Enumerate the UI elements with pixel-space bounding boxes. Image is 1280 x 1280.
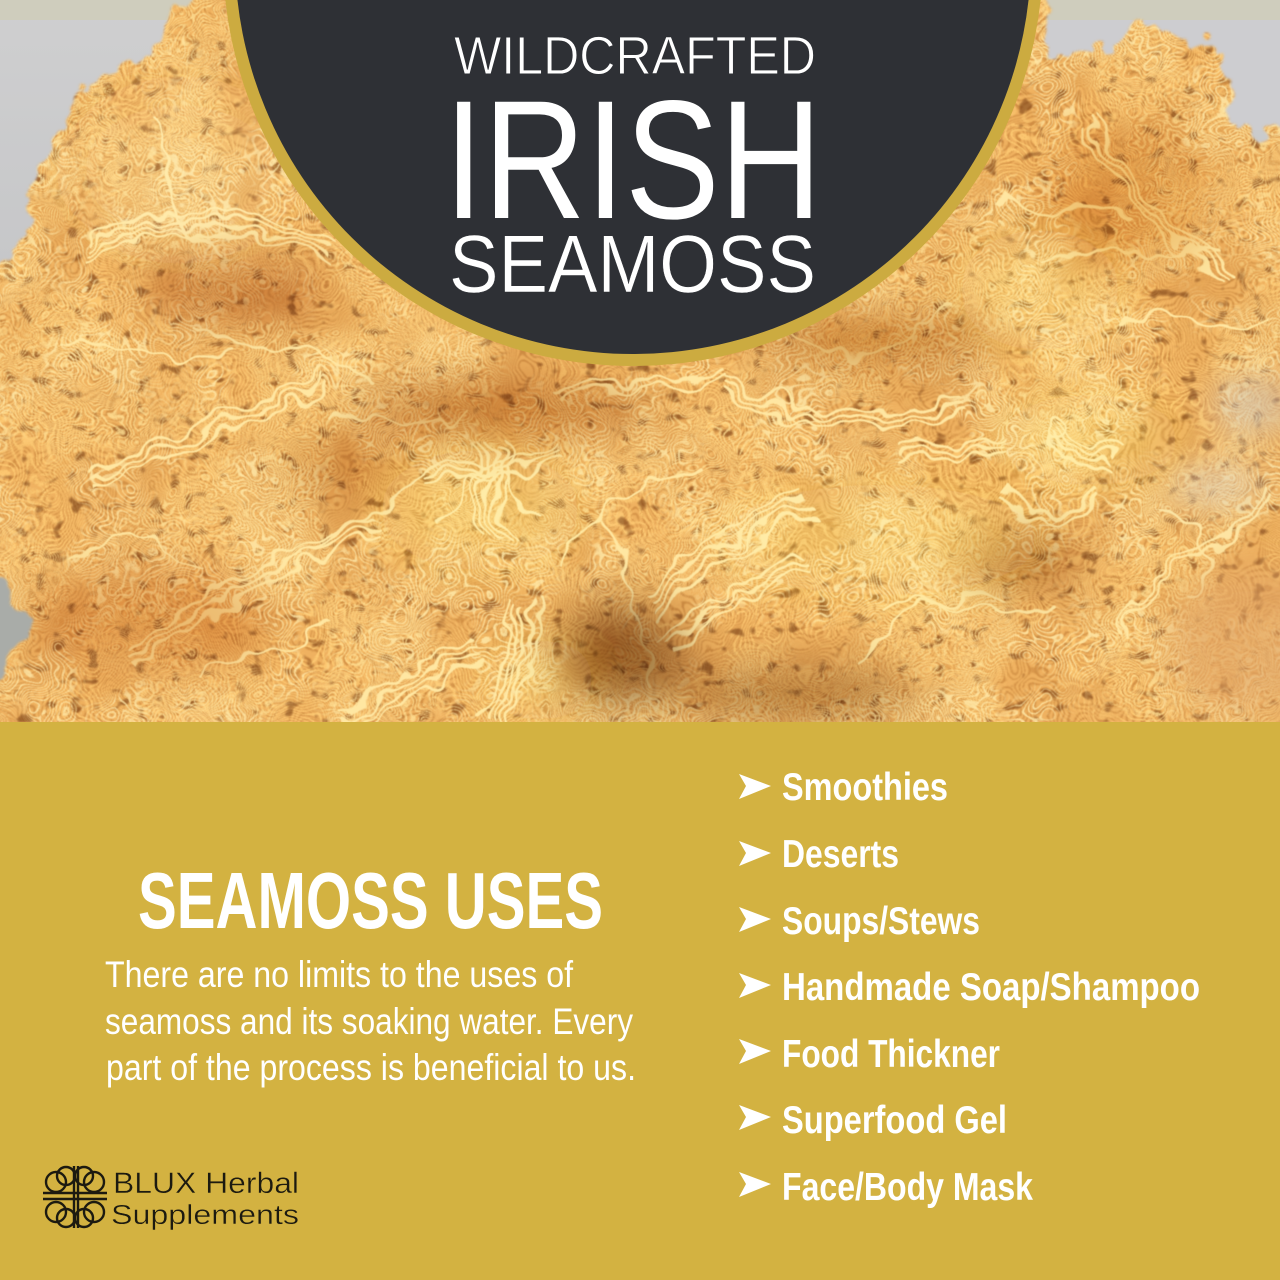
- panel: gold lower section: [0, 722, 1280, 1280]
- item: Smoothies: Smoothies: [782, 766, 948, 809]
- logo: BLUX Herbal Supplements: [43, 1166, 299, 1230]
- logo text: BLUX Herbal: [113, 1167, 299, 1200]
- text block: description: [105, 954, 636, 1088]
- out-of-focus right edge: [1165, 375, 1280, 715]
- item: Superfood Gel: Superfood Gel: [782, 1099, 1007, 1142]
- text block: description: seamoss and its soaking water. Every: [105, 1001, 633, 1042]
- list: seamoss uses items: [739, 766, 1200, 1209]
- item: Food Thickner: Food Thickner: [782, 1033, 1000, 1076]
- title line: WILDCRAFTED: WILDCRAFTED: [454, 26, 816, 86]
- heading: seamoss uses: SEAMOSS USES: [138, 856, 603, 945]
- text block: description: There are no limits to the uses of: [105, 954, 574, 995]
- title line: SEAMOSS: SEAMOSS: [449, 219, 816, 310]
- panel: seamoss photo background: [0, 0, 1280, 722]
- icon: knot emblem: [43, 1166, 107, 1228]
- header badge: gold ring and dark semicircle: [223, 0, 1043, 366]
- text block: description: part of the process is beneficial to us.: [106, 1047, 636, 1088]
- brighter sunlit areas: [70, 90, 1180, 720]
- title line: IRISH: IRISH: [444, 65, 822, 254]
- item: Food Thickner: [739, 1033, 1000, 1076]
- item: Soups/Stews: [739, 900, 980, 943]
- item: Soups/Stews: Soups/Stews: [782, 900, 980, 943]
- strand bundles: [60, 116, 1271, 736]
- tonal shading: [0, 0, 1280, 722]
- seamoss fibres: [0, 0, 1280, 722]
- logo: BLUX Herbal Supplements: Supplements: [111, 1199, 299, 1230]
- item: Deserts: [739, 833, 899, 876]
- item: Smoothies: [739, 766, 948, 809]
- item: Face/Body Mask: Face/Body Mask: [782, 1166, 1033, 1209]
- item: Deserts: Deserts: [782, 833, 899, 876]
- item: Handmade Soap/Shampoo: Handmade Soap/Shampoo: [782, 966, 1200, 1009]
